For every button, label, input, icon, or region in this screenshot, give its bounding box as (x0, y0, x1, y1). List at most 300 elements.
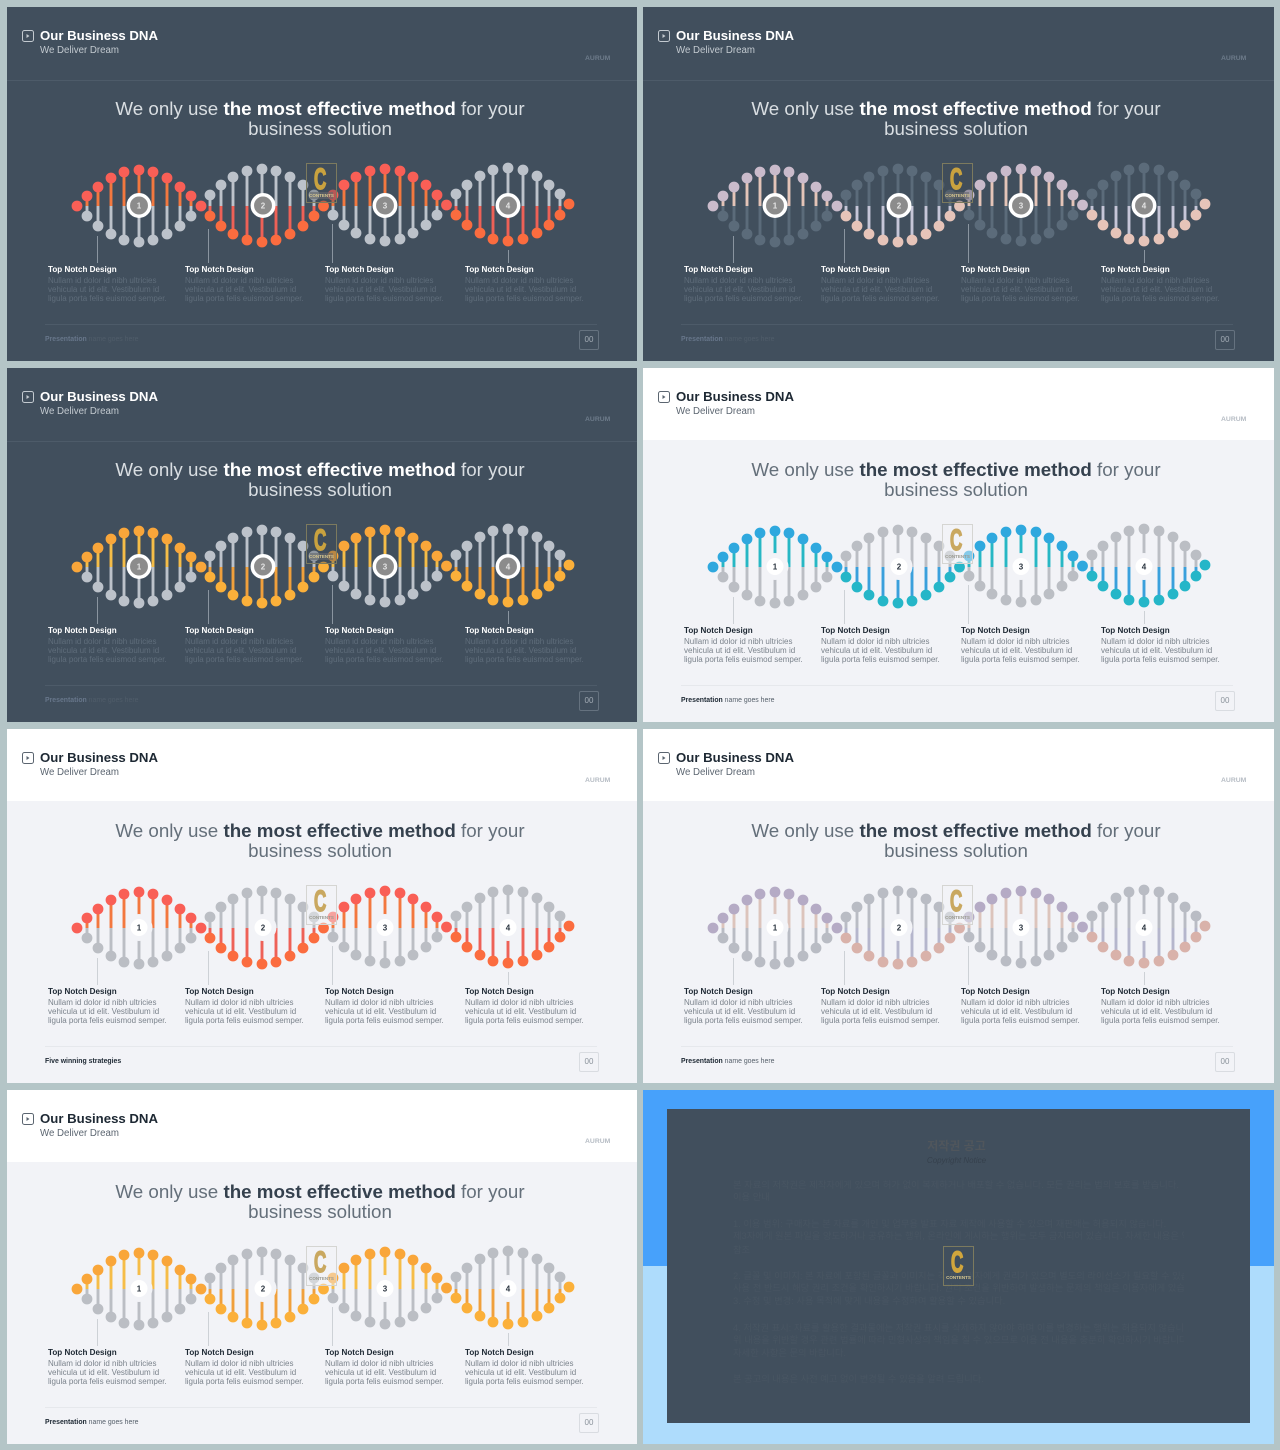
text block 2: Top Notch Design (185, 265, 254, 274)
logo watermark: C (950, 163, 962, 196)
heading: We only use the most effective method for your (115, 1180, 525, 1202)
DNA helix chart (708, 524, 1210, 608)
icon: play box (22, 752, 34, 764)
connector 4 (508, 250, 509, 263)
text block 3 (325, 626, 444, 664)
node 1 (126, 1275, 152, 1302)
connector 1 (97, 958, 98, 985)
node 4 (494, 914, 522, 941)
text block 3: Nullam id dolor id nibh ultricies (961, 276, 1070, 284)
copyright card (667, 1109, 1250, 1423)
text block 1 (48, 626, 167, 664)
text block 3: vehicula ut id elit. Vestibulum id (961, 1006, 1072, 1016)
header (643, 368, 1274, 440)
DNA helix chart (67, 1240, 587, 1340)
text block 2: Top Notch Design (185, 1348, 254, 1357)
text block 2: Nullam id dolor id nibh ultricies (185, 276, 294, 284)
page number (579, 1052, 599, 1072)
text block 4: Top Notch Design (1101, 987, 1170, 996)
text block 4 (1101, 265, 1220, 302)
copyright body text: 이용 안내 (733, 1192, 770, 1202)
text block 4: vehicula ut id elit. Vestibulum id (465, 1006, 576, 1016)
text block 4 (465, 987, 600, 1024)
node 3 (374, 556, 396, 577)
heading: business solution (884, 840, 1028, 860)
logo watermark: C (314, 885, 326, 918)
text block 3: Top Notch Design (961, 987, 1030, 996)
footer text: Presentation name goes here (681, 336, 774, 342)
subtitle: We Deliver Dream (676, 45, 755, 56)
panel: dark orange slide (7, 368, 637, 722)
node 4 (1130, 914, 1158, 941)
title: Our Business DNA (676, 750, 794, 764)
logo watermark (306, 163, 337, 203)
icon: play box (22, 30, 34, 42)
page number: 00 (585, 696, 593, 705)
node 1 (128, 556, 150, 577)
text block 2: vehicula ut id elit. Vestibulum id (821, 284, 932, 294)
logo watermark (306, 524, 337, 564)
text block 2: ligula porta felis euismod semper. (185, 1016, 304, 1024)
header (643, 7, 1274, 81)
text block 1: vehicula ut id elit. Vestibulum id (684, 284, 795, 294)
text block 1: ligula porta felis euismod semper. (48, 294, 167, 302)
copyright heading: 저작권 공고 (927, 1139, 986, 1153)
node 2: 2 (261, 202, 266, 210)
text block 2: ligula porta felis euismod semper. (821, 294, 940, 302)
page number: 00 (585, 1418, 593, 1427)
node 2: 2 (897, 562, 902, 572)
connector 3 (968, 946, 969, 985)
node 3: 3 (1019, 924, 1024, 932)
title: Our Business DNA (40, 388, 158, 404)
text block 2: Top Notch Design (185, 626, 254, 635)
text block 3: Nullam id dolor id nibh ultricies (961, 998, 1070, 1006)
subtitle: We Deliver Dream (40, 1128, 119, 1139)
logo watermark: CONTENTS (309, 915, 334, 920)
node 4 (497, 195, 519, 216)
page number: 00 (1221, 335, 1229, 344)
logo watermark: CONTENTS (309, 193, 334, 198)
brand: AURUM (585, 55, 610, 62)
text block 4: vehicula ut id elit. Vestibulum id (1101, 1006, 1212, 1016)
heading: business solution (884, 118, 1028, 138)
text block 3: vehicula ut id elit. Vestibulum id (961, 284, 1072, 294)
DNA helix chart (72, 884, 574, 970)
node 3: 3 (1019, 202, 1024, 210)
text block 2 (821, 987, 956, 1024)
text block 4: Top Notch Design (465, 987, 534, 996)
node 3 (1008, 914, 1034, 941)
logo watermark: C (950, 524, 962, 557)
connector 1 (733, 236, 734, 263)
header (7, 1090, 637, 1162)
subtitle: We Deliver Dream (676, 767, 755, 778)
text block 3: Top Notch Design (961, 265, 1030, 274)
text block 1: Top Notch Design (684, 626, 753, 635)
text block 3: ligula porta felis euismod semper. (325, 654, 444, 664)
connector 2 (844, 590, 845, 624)
copyright body text: 1. 이용 범위: 구매자는 본 자료를 개인 및 업무용 발표 자료 제작에 사용할 수 있으며 재판매는 허용되지 않습니다. (733, 1219, 1166, 1229)
text block 4: vehicula ut id elit. Vestibulum id (1101, 284, 1212, 294)
DNA helix chart (72, 162, 574, 248)
text block 4: Top Notch Design (1101, 265, 1170, 274)
text block 3: ligula porta felis euismod semper. (961, 294, 1080, 302)
text block 1: Top Notch Design (48, 1348, 117, 1357)
text block 1 (684, 987, 819, 1024)
text block 2: vehicula ut id elit. Vestibulum id (185, 646, 296, 654)
connector 1 (97, 1319, 98, 1346)
text block 2: Nullam id dolor id nibh ultricies (821, 636, 930, 646)
connector 2 (208, 951, 209, 985)
text block 4 (465, 1348, 600, 1386)
connector 4 (508, 611, 509, 624)
heading (7, 1182, 633, 1222)
connector 2 (844, 229, 845, 263)
footer text: Presentation name goes here (681, 1058, 774, 1064)
node 1: 1 (137, 562, 142, 572)
subtitle: We Deliver Dream (676, 406, 755, 417)
copyright body text: 위 내용을 위반할 경우 관련 법률에 따라 민형사상의 책임을 질 수 있으므로 이용 전 내용을 충분히 확인하시기 바랍니다. (733, 1335, 1184, 1345)
copyright body text: 참조 (733, 1245, 750, 1255)
node 1: 1 (137, 924, 142, 932)
text block 4: vehicula ut id elit. Vestibulum id (465, 1368, 576, 1376)
connector 4 (508, 972, 509, 985)
text block 4: ligula porta felis euismod semper. (465, 1016, 584, 1024)
heading: We only use the most effective method for your (751, 98, 1161, 118)
node 1: 1 (773, 202, 778, 210)
heading (115, 98, 525, 138)
text block 1: ligula porta felis euismod semper. (684, 654, 803, 664)
text block 4: vehicula ut id elit. Vestibulum id (1101, 646, 1212, 654)
heading: business solution (248, 1200, 392, 1222)
text block 4: ligula porta felis euismod semper. (465, 294, 584, 302)
node 4: 4 (506, 562, 511, 572)
logo watermark: C (314, 1246, 326, 1279)
node 1: 1 (137, 1284, 142, 1294)
text block 4: Top Notch Design (465, 626, 534, 635)
page number: 00 (1221, 1057, 1229, 1066)
text block 1 (48, 1348, 183, 1386)
text block 2: Top Notch Design (821, 987, 890, 996)
heading (751, 98, 1161, 138)
text block 1: Nullam id dolor id nibh ultricies (684, 998, 792, 1006)
text block 4: Top Notch Design (465, 265, 534, 274)
node 4 (1130, 553, 1158, 580)
text block 4: Nullam id dolor id nibh ultricies (1101, 998, 1210, 1006)
gold logo (942, 1246, 975, 1286)
text block 3: vehicula ut id elit. Vestibulum id (325, 284, 436, 294)
text block 2 (185, 626, 304, 664)
text block 2: vehicula ut id elit. Vestibulum id (185, 1368, 296, 1376)
text block 3: vehicula ut id elit. Vestibulum id (325, 646, 436, 654)
node 4: 4 (506, 924, 511, 932)
text block 2: Top Notch Design (821, 265, 890, 274)
text block 2: Nullam id dolor id nibh ultricies (185, 636, 294, 646)
text block 1: Top Notch Design (684, 265, 753, 274)
title: Our Business DNA (40, 750, 158, 764)
connector 2 (208, 229, 209, 263)
header (7, 7, 637, 81)
text block 3: Top Notch Design (325, 1348, 394, 1357)
node 2: 2 (261, 924, 266, 932)
text block 3: Nullam id dolor id nibh ultricies (325, 1358, 434, 1368)
icon: play box (22, 391, 34, 403)
copyright body text (667, 1109, 1250, 1423)
text block 2: Top Notch Design (185, 987, 254, 996)
node 2: 2 (261, 1284, 266, 1294)
text block 1: vehicula ut id elit. Vestibulum id (48, 646, 159, 654)
text block 3: vehicula ut id elit. Vestibulum id (325, 1006, 436, 1016)
text block 4: Nullam id dolor id nibh ultricies (1101, 276, 1210, 284)
text block 3: ligula porta felis euismod semper. (325, 1016, 444, 1024)
brand: AURUM (585, 1138, 610, 1145)
text block 1: Nullam id dolor id nibh ultricies (48, 998, 156, 1006)
node 1: 1 (137, 202, 142, 210)
text block 4: ligula porta felis euismod semper. (465, 654, 584, 664)
copyright body text: 본 자료의 저작권은 제작자에게 있으며 허가 없이 복제하거나 배포할 수 없습니다. 모든 권리는 법의 보호를 받습니다. (733, 1180, 1179, 1190)
node 4 (494, 1275, 522, 1302)
copyright body text: 3. 수정 및 변경: 사용 목적에 맞게 내용을 수정하여 활용할 수 있습니다. (733, 1296, 1005, 1306)
heading (643, 820, 1269, 860)
text block 1 (48, 987, 183, 1024)
connector 1 (97, 597, 98, 624)
node 4: 4 (506, 202, 511, 210)
text block 3 (325, 1348, 460, 1386)
text block 3: Nullam id dolor id nibh ultricies (325, 998, 434, 1006)
panel: light pastel slide (643, 729, 1274, 1083)
footer text: Presentation name goes here (45, 336, 138, 342)
panel: dark red slide (7, 7, 637, 361)
text block 3: vehicula ut id elit. Vestibulum id (325, 1368, 436, 1376)
text block 3: ligula porta felis euismod semper. (325, 294, 444, 302)
text block 2: Nullam id dolor id nibh ultricies (185, 1358, 294, 1368)
text block 1: Nullam id dolor id nibh ultricies (684, 276, 792, 284)
node 4 (497, 556, 519, 577)
text block 2: ligula porta felis euismod semper. (185, 294, 304, 302)
text block 4: vehicula ut id elit. Vestibulum id (465, 646, 576, 654)
heading (115, 820, 525, 860)
node 1 (762, 914, 788, 941)
connector 2 (844, 951, 845, 985)
connector 3 (332, 224, 333, 263)
text block 1: Top Notch Design (48, 626, 117, 635)
connector 3 (332, 585, 333, 624)
node 1 (126, 914, 152, 941)
text block 2 (185, 987, 320, 1024)
node 3 (372, 1275, 398, 1302)
text block 2 (185, 265, 304, 302)
text block 2: Nullam id dolor id nibh ultricies (185, 998, 294, 1006)
text block 3: Top Notch Design (325, 987, 394, 996)
connector 3 (332, 1307, 333, 1346)
text block 1: ligula porta felis euismod semper. (48, 654, 167, 664)
node 2 (250, 1275, 276, 1302)
text block 2: Top Notch Design (821, 626, 890, 635)
text block 1: vehicula ut id elit. Vestibulum id (48, 284, 159, 294)
page number: 00 (1221, 696, 1229, 705)
copyright body text: 본 공고의 내용은 사전 예고 없이 변경될 수 있음을 알려 드립니다. (733, 1374, 984, 1384)
brand: AURUM (585, 777, 610, 784)
text block 3 (961, 265, 1080, 302)
connector 3 (332, 946, 333, 985)
node 1: 1 (773, 924, 778, 932)
text block 2: vehicula ut id elit. Vestibulum id (185, 284, 296, 294)
node 3: 3 (383, 1284, 388, 1294)
node 1 (128, 195, 150, 216)
title: Our Business DNA (676, 388, 794, 404)
connector 1 (97, 236, 98, 263)
node 3: 3 (383, 562, 388, 572)
logo watermark (942, 524, 973, 564)
node 2 (886, 553, 912, 580)
logo watermark (306, 1246, 337, 1286)
text block 1: Top Notch Design (48, 987, 117, 996)
text block 4: Nullam id dolor id nibh ultricies (1101, 636, 1210, 646)
text block 2: ligula porta felis euismod semper. (185, 654, 304, 664)
page number (579, 1413, 599, 1433)
node 3 (374, 195, 396, 216)
subtitle: We Deliver Dream (40, 45, 119, 56)
text block 3 (961, 626, 1080, 664)
text block 1: ligula porta felis euismod semper. (684, 294, 803, 302)
title: Our Business DNA (676, 28, 794, 42)
connector 4 (1144, 611, 1145, 624)
text block 1: vehicula ut id elit. Vestibulum id (48, 1006, 159, 1016)
connector 2 (208, 590, 209, 624)
text block 1: ligula porta felis euismod semper. (48, 1016, 167, 1024)
node 1 (764, 195, 786, 216)
footer text: Five winning strategies (45, 1058, 121, 1064)
node 2 (886, 914, 912, 941)
brand: AURUM (1221, 416, 1246, 423)
footer text: Presentation name goes here (45, 1418, 138, 1426)
logo watermark: C (314, 163, 326, 196)
text block 1: Nullam id dolor id nibh ultricies (684, 636, 792, 646)
text block 3: ligula porta felis euismod semper. (325, 1376, 444, 1386)
page number (1215, 330, 1235, 350)
text block 4 (465, 626, 584, 664)
connector 2 (208, 1312, 209, 1346)
text block 1: Nullam id dolor id nibh ultricies (48, 636, 156, 646)
logo watermark: CONTENTS (945, 915, 970, 920)
heading: We only use the most effective method for your (115, 98, 525, 118)
text block 2: ligula porta felis euismod semper. (821, 1016, 940, 1024)
gold logo: C (951, 1246, 963, 1279)
node 2: 2 (261, 562, 266, 572)
text block 4 (1101, 987, 1236, 1024)
text block 4 (1101, 626, 1220, 664)
header (7, 368, 637, 442)
node 2 (888, 195, 910, 216)
node 4: 4 (1142, 202, 1147, 210)
text block 4: Nullam id dolor id nibh ultricies (465, 998, 574, 1006)
subtitle: We Deliver Dream (40, 406, 119, 417)
logo watermark (942, 885, 973, 925)
node 3 (372, 914, 398, 941)
text block 3: ligula porta felis euismod semper. (961, 654, 1080, 664)
node 2 (252, 556, 274, 577)
text block 2: vehicula ut id elit. Vestibulum id (821, 1006, 932, 1016)
heading (751, 458, 1161, 500)
page number: 00 (585, 1057, 593, 1066)
logo watermark: CONTENTS (945, 193, 970, 198)
DNA helix chart (703, 879, 1223, 979)
text block 1: Nullam id dolor id nibh ultricies (48, 276, 156, 284)
copyright body text: 4. 저작권 표시: 자료를 활용한 결과물에는 저작권 표시를 삭제하지 않아야 하며 이를 변경하는 행위는 허용되지 않습니다. (733, 1323, 1184, 1333)
connector 4 (1144, 972, 1145, 985)
logo watermark (942, 163, 973, 203)
brand: AURUM (1221, 777, 1246, 784)
text block 2: vehicula ut id elit. Vestibulum id (821, 646, 932, 654)
text block 2: ligula porta felis euismod semper. (821, 654, 940, 664)
text block 4: Top Notch Design (1101, 626, 1170, 635)
heading: business solution (884, 478, 1028, 500)
panel: light orange slide (7, 1090, 637, 1444)
logo watermark: C (950, 885, 962, 918)
text block 1 (684, 265, 803, 302)
text block 3: vehicula ut id elit. Vestibulum id (961, 646, 1072, 654)
text block 1: vehicula ut id elit. Vestibulum id (684, 646, 795, 654)
text block 3 (325, 987, 460, 1024)
text block 2: Nullam id dolor id nibh ultricies (821, 276, 930, 284)
node 3: 3 (383, 202, 388, 210)
copyright body text: 자세한 사항은 문의 바랍니다. (733, 1348, 846, 1358)
node 1 (762, 553, 788, 580)
panel: light teal slide (643, 368, 1274, 722)
gold logo: CONTENTS (946, 1275, 971, 1280)
icon: play box (658, 30, 670, 42)
brand: AURUM (1221, 55, 1246, 62)
panel: light red slide (7, 729, 637, 1083)
connector 3 (968, 585, 969, 624)
connector 4 (508, 1333, 509, 1346)
node 3: 3 (383, 924, 388, 932)
text block 2: Nullam id dolor id nibh ultricies (821, 998, 930, 1006)
text block 4: ligula porta felis euismod semper. (465, 1376, 584, 1386)
text block 4: ligula porta felis euismod semper. (1101, 294, 1220, 302)
page number (579, 330, 599, 350)
text block 3: Nullam id dolor id nibh ultricies (961, 636, 1070, 646)
heading (115, 458, 525, 500)
node 1: 1 (773, 562, 778, 572)
node 4: 4 (1142, 924, 1147, 932)
panel: dark pastel slide (643, 7, 1274, 361)
logo watermark: CONTENTS (945, 554, 970, 559)
text block 4: vehicula ut id elit. Vestibulum id (465, 284, 576, 294)
connector 3 (968, 224, 969, 263)
text block 4: Nullam id dolor id nibh ultricies (465, 276, 574, 284)
page number (579, 691, 599, 711)
panel: copyright notice slide (643, 1090, 1274, 1444)
logo watermark: C (314, 524, 326, 557)
DNA helix chart (708, 162, 1210, 248)
heading: We only use the most effective method for your (115, 820, 525, 840)
heading: business solution (248, 840, 392, 860)
connector 1 (733, 958, 734, 985)
node 2 (252, 195, 274, 216)
text block 3: Nullam id dolor id nibh ultricies (325, 276, 434, 284)
text block 4 (465, 265, 584, 302)
DNA helix chart (72, 524, 574, 608)
icon: play box (658, 391, 670, 403)
text block 4: Nullam id dolor id nibh ultricies (465, 1358, 574, 1368)
text block 3: Top Notch Design (325, 626, 394, 635)
connector 4 (1144, 250, 1145, 263)
copyright subtitle: Copyright Notice (927, 1156, 986, 1165)
heading: We only use the most effective method for your (115, 458, 525, 480)
icon: play box (658, 752, 670, 764)
